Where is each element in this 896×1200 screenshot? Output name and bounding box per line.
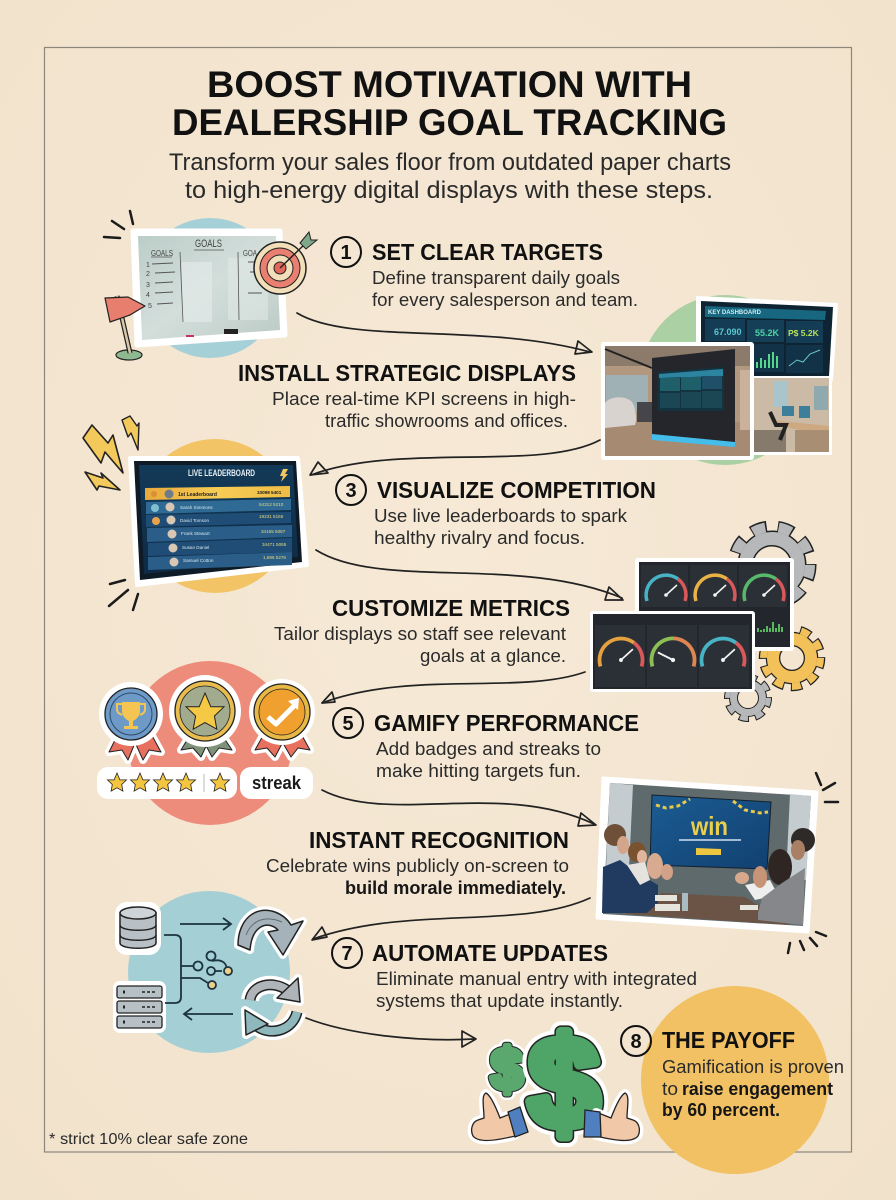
panel: step 3 leaderboard: Frank Stewart bbox=[181, 531, 210, 536]
title bbox=[172, 64, 727, 143]
panel: step 1 illustration whiteboard bbox=[104, 211, 285, 358]
step 4 heading: CUSTOMIZE METRICS bbox=[332, 595, 570, 621]
panel: step 3 leaderboard: David Tomson bbox=[180, 518, 209, 523]
step 2 heading: INSTALL STRATEGIC DISPLAYS bbox=[238, 360, 576, 386]
panel: step 1 illustration whiteboard: GOA bbox=[243, 249, 258, 258]
arrow 6 to 7 bbox=[312, 898, 590, 940]
panel: payoff circle bbox=[641, 986, 829, 1174]
panel: step 3 leaderboard: Sarah Simmons bbox=[180, 505, 213, 510]
step 3 text: Use live leaderboards to spark bbox=[374, 506, 628, 526]
panel: step 1 illustration whiteboard: GOALS bbox=[151, 249, 173, 258]
step 8 text: by 60 percent. bbox=[662, 1100, 780, 1120]
footnote: * strict 10% clear safe zone bbox=[49, 1131, 248, 1148]
icon: curved arrow bbox=[238, 910, 303, 955]
step 3 number: 3 bbox=[345, 480, 357, 502]
panel: step 3 leaderboard: LIVE LEADERBOARD bbox=[188, 468, 255, 479]
icon: dollar signs and thumbs up: $ bbox=[528, 1012, 600, 1155]
panel: step 1 illustration whiteboard: 3 bbox=[146, 282, 150, 289]
panel: step 3 leaderboard bbox=[83, 416, 307, 610]
panel: step 1 illustration whiteboard: 5 bbox=[148, 303, 152, 310]
step 6 text: build morale immediately. bbox=[345, 878, 566, 898]
icon: yellow gear bbox=[764, 630, 820, 686]
arrow: sync to server bbox=[184, 1008, 233, 1020]
step 5 text: Add badges and streaks to bbox=[376, 739, 601, 759]
panel: step 2 illustration displays: 67.090 bbox=[714, 327, 742, 337]
step 7 text: systems that update instantly. bbox=[376, 991, 623, 1011]
subtitle: Transform your sales floor from outdated paper charts bbox=[169, 149, 731, 176]
step 6 text: Celebrate wins publicly on-screen to bbox=[266, 856, 569, 876]
panel: step 3 leaderboard: 1,696 5276 bbox=[263, 555, 286, 560]
icon: dollar signs and thumbs up: $ bbox=[528, 1012, 600, 1155]
step 2 text: Place real-time KPI screens in high- bbox=[272, 389, 576, 409]
icon: check badge bbox=[249, 679, 315, 757]
panel: step 5 badges bbox=[97, 661, 315, 825]
icon: dollar signs and thumbs up: $ bbox=[491, 1037, 523, 1102]
step 2 text bbox=[272, 389, 576, 431]
showroom photo bbox=[601, 342, 754, 460]
arrow 3 to 4 bbox=[316, 550, 623, 600]
step 7 number bbox=[332, 938, 362, 968]
step 4 text bbox=[274, 624, 566, 666]
panel: step 1 illustration whiteboard: GOALS bbox=[195, 238, 222, 250]
icon: sync arrows bbox=[245, 978, 300, 1035]
step 8 text bbox=[662, 1057, 844, 1120]
step 1 text: Define transparent daily goals bbox=[372, 268, 620, 288]
step 5 text bbox=[376, 739, 601, 781]
panel: step 1 illustration whiteboard: 1 bbox=[146, 262, 150, 269]
icon: dollar signs and thumbs up bbox=[472, 1012, 639, 1155]
icon: small gear bbox=[728, 678, 768, 718]
panel: step 3 leaderboard: Susan Daniel bbox=[182, 545, 209, 550]
office photo bbox=[752, 376, 832, 455]
step 7 number: 7 bbox=[341, 943, 353, 965]
people applauding bbox=[602, 824, 815, 925]
panel: step 2 illustration displays: KEY DASHBOARD bbox=[708, 310, 762, 316]
icon: gray gear bbox=[734, 527, 810, 603]
arrow 4 to 5 bbox=[322, 672, 585, 703]
panel: step 2 illustration displays: 55.2K bbox=[755, 328, 780, 338]
arrow: database to sync bbox=[180, 918, 231, 930]
panel: step 1 illustration whiteboard: 4 bbox=[146, 292, 150, 299]
streak pill: streak bbox=[252, 773, 302, 793]
step 8 text: to bbox=[662, 1079, 678, 1099]
step 8 number: 8 bbox=[630, 1031, 642, 1053]
arrow 2 to 3 bbox=[310, 440, 600, 475]
step 6 text bbox=[266, 856, 569, 898]
panel: step 3 leaderboard: 1st Leaderboard bbox=[178, 492, 217, 498]
panel: step 3 leaderboard: 33098 5401 bbox=[257, 490, 282, 495]
step 1 text: for every salesperson and team. bbox=[372, 290, 638, 310]
step 8 heading: THE PAYOFF bbox=[662, 1027, 795, 1053]
step 1 number bbox=[331, 237, 361, 267]
step 3 heading: VISUALIZE COMPETITION bbox=[377, 477, 656, 503]
right thumb bbox=[584, 1093, 639, 1140]
step 7 text: Eliminate manual entry with integrated bbox=[376, 969, 697, 989]
icon: dollar signs and thumbs up: $ bbox=[491, 1037, 523, 1102]
step 5 heading: GAMIFY PERFORMANCE bbox=[374, 710, 639, 736]
arrow 5 to 6 bbox=[322, 790, 596, 826]
step 7 text bbox=[376, 969, 697, 1011]
step 8 number bbox=[621, 1026, 651, 1056]
icon: red signpost flag bbox=[105, 296, 145, 360]
star rating pill bbox=[97, 767, 237, 799]
icon: lightning bolts bbox=[83, 416, 139, 490]
left thumb bbox=[472, 1093, 528, 1140]
icon: target with dart bbox=[254, 232, 317, 294]
panel: step 2 illustration displays: P$ 5.2K bbox=[788, 328, 820, 338]
network connector bbox=[164, 935, 232, 1003]
step 3 text: healthy rivalry and focus. bbox=[374, 528, 585, 548]
streak pill bbox=[240, 767, 313, 799]
step 8 text: Gamification is proven bbox=[662, 1057, 844, 1077]
panel: step 1 illustration whiteboard: 2 bbox=[146, 271, 150, 278]
arrow 1 to 2 bbox=[297, 313, 592, 354]
arrow 7 to 8 bbox=[306, 1018, 476, 1047]
panel: step 4 gears and gauges bbox=[590, 527, 820, 718]
icon: database bbox=[115, 902, 161, 955]
panel: step 6 win photo: win bbox=[690, 811, 728, 841]
icon: server rack bbox=[113, 981, 166, 1033]
step 7 heading: AUTOMATE UPDATES bbox=[372, 940, 608, 966]
step 6 heading: INSTANT RECOGNITION bbox=[309, 827, 569, 853]
panel: step 3 leaderboard: 19231 5155 bbox=[259, 514, 284, 519]
icon: dollar signs and thumbs up: $ bbox=[491, 1037, 523, 1102]
panel: step 3 leaderboard: 34165 5087 bbox=[261, 529, 286, 534]
step 8 text: raise engagement bbox=[682, 1079, 833, 1099]
icon: star badge bbox=[169, 675, 241, 757]
subtitle bbox=[169, 149, 731, 204]
panel: step 7 automation bbox=[113, 891, 303, 1053]
step 1 text bbox=[372, 268, 638, 310]
icon: trophy badge bbox=[99, 682, 163, 760]
title: BOOST MOTIVATION WITH bbox=[207, 64, 692, 105]
step 5 number: 5 bbox=[342, 713, 354, 735]
panel: step 3 leaderboard: 54312 5210 bbox=[259, 502, 284, 507]
step 1 number: 1 bbox=[340, 242, 352, 264]
panel: step 3 leaderboard: 34471 5065 bbox=[262, 542, 287, 547]
step 4 text: Tailor displays so staff see relevant bbox=[274, 624, 566, 644]
panel: step 3 leaderboard: Samuel Cotton bbox=[183, 558, 214, 563]
step 5 number bbox=[333, 708, 363, 738]
title: DEALERSHIP GOAL TRACKING bbox=[172, 102, 727, 143]
panel: step 2 illustration displays bbox=[640, 295, 837, 465]
step 4 text: goals at a glance. bbox=[420, 646, 566, 666]
step 3 text bbox=[374, 506, 628, 548]
step 2 text: traffic showrooms and offices. bbox=[325, 411, 568, 431]
step 1 heading: SET CLEAR TARGETS bbox=[372, 239, 603, 265]
subtitle: to high-energy digital displays with these steps. bbox=[185, 177, 713, 204]
icon: dollar signs and thumbs up: $ bbox=[528, 1012, 600, 1155]
panel: step 6 win photo bbox=[597, 773, 838, 953]
step 5 text: make hitting targets fun. bbox=[376, 761, 581, 781]
step 3 number bbox=[336, 475, 366, 505]
